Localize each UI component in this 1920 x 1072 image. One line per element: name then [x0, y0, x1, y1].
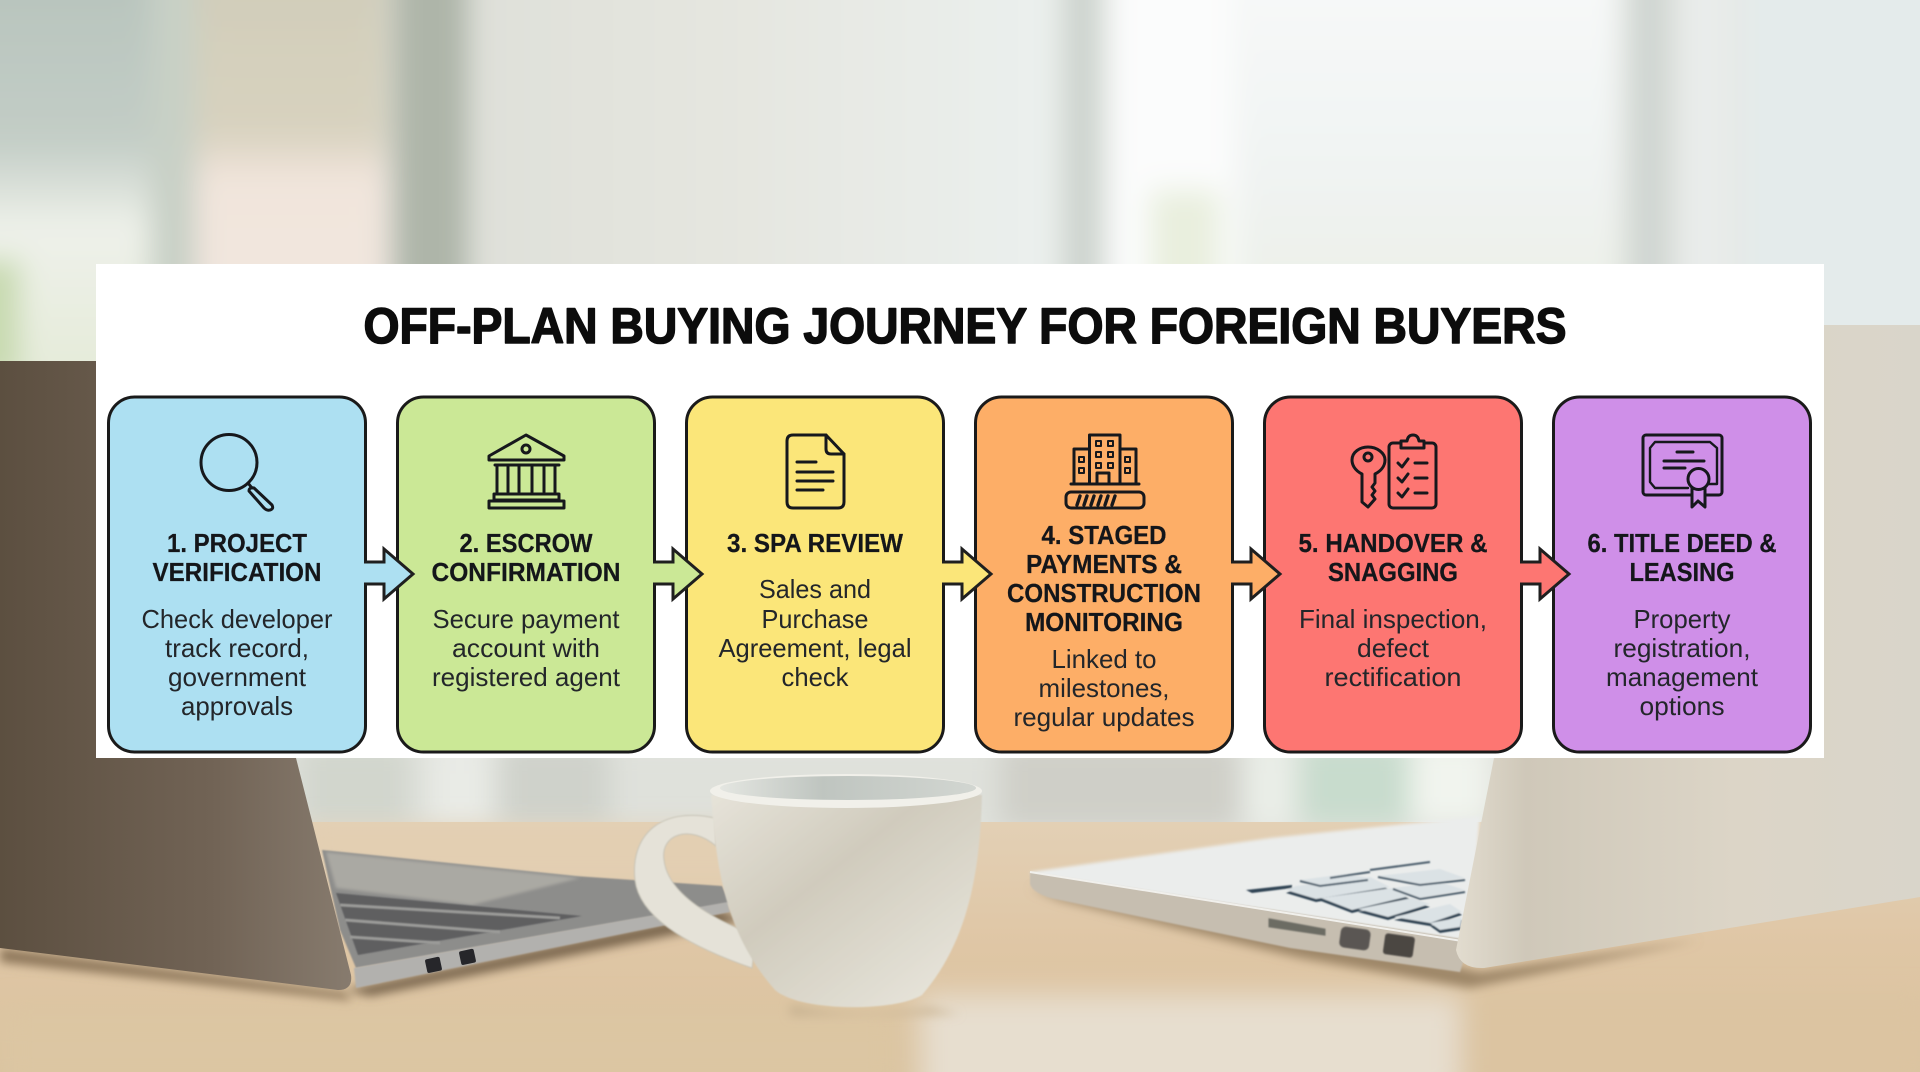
heading: [1298, 528, 1488, 587]
arrow: step 4 to 5: [1229, 549, 1280, 599]
description: [1014, 644, 1194, 732]
right laptop: [1030, 325, 1920, 988]
description: [432, 604, 621, 692]
heading: 3. SPA REVIEW: [727, 528, 903, 558]
card 1: project verification: [108, 397, 366, 752]
white infographic panel: [96, 264, 1824, 758]
heading: LEASING: [1630, 557, 1734, 587]
description: Property: [1634, 604, 1730, 634]
heading: [432, 528, 620, 587]
card 6: title deed and leasing: [1554, 397, 1810, 752]
heading: SNAGGING: [1328, 557, 1458, 587]
description: [718, 574, 912, 692]
heading: [152, 528, 322, 587]
ports: [1270, 920, 1324, 934]
icon: buildings with progress bar: [1066, 435, 1144, 508]
icon: magnifying glass: [201, 434, 273, 510]
heading: 2. ESCROW: [460, 528, 593, 558]
coffee mug: [634, 774, 982, 1016]
icon: bank building: [489, 435, 564, 508]
blurred window backdrop: [0, 0, 1920, 420]
description: Agreement, legal: [718, 633, 912, 663]
description: Linked to: [1052, 644, 1156, 674]
heading: CONSTRUCTION: [1007, 578, 1201, 608]
card 4: staged payments and construction monitoring: [976, 397, 1232, 752]
keyboard keys: [1246, 862, 1465, 933]
heading: CONFIRMATION: [432, 557, 620, 587]
icon: key and clipboard: [1352, 435, 1436, 508]
heading: MONITORING: [1025, 607, 1183, 637]
heading: 1. PROJECT: [167, 528, 307, 558]
card 3: SPA review: [686, 397, 944, 752]
heading: 5. HANDOVER &: [1298, 528, 1488, 558]
heading: [1007, 520, 1201, 637]
wooden table: [0, 822, 1920, 1072]
description: registered agent: [432, 662, 621, 692]
icon: certificate with seal: [1643, 435, 1722, 507]
description: management: [1606, 662, 1759, 692]
heading: VERIFICATION: [152, 557, 322, 587]
arrow: step 3 to 4: [940, 549, 991, 599]
description: Sales and: [759, 574, 871, 604]
title: OFF-PLAN BUYING JOURNEY FOR FOREIGN BUYERS: [364, 298, 1566, 354]
arrow: step 1 to 2: [362, 549, 413, 599]
description: government: [168, 662, 307, 692]
description: track record,: [165, 633, 309, 663]
card 5: handover and snagging: [1264, 397, 1522, 752]
arrow: step 5 to 6: [1518, 549, 1569, 599]
card 2: escrow confirmation: [398, 397, 654, 752]
icon: document: [787, 435, 844, 508]
arrow: step 2 to 3: [651, 549, 702, 599]
description: registration,: [1614, 633, 1750, 663]
heading: 6. TITLE DEED &: [1588, 528, 1776, 558]
heading: [1588, 528, 1776, 587]
blurred room strip below panel: [250, 740, 1550, 840]
description: Check developer: [142, 604, 333, 634]
description: regular updates: [1014, 702, 1194, 732]
description: [142, 604, 333, 721]
description: check: [782, 662, 849, 692]
description: [1606, 604, 1759, 721]
description: approvals: [181, 691, 293, 721]
heading: PAYMENTS &: [1026, 549, 1182, 579]
description: milestones,: [1038, 673, 1170, 703]
description: Purchase: [762, 604, 868, 634]
description: [1299, 604, 1487, 692]
description: Secure payment: [432, 604, 620, 634]
description: account with: [452, 633, 600, 663]
description: options: [1640, 691, 1724, 721]
description: Final inspection,: [1299, 604, 1487, 634]
heading: 4. STAGED: [1042, 520, 1166, 550]
left laptop: [0, 361, 745, 1000]
description: rectification: [1324, 662, 1462, 692]
description: defect: [1357, 633, 1430, 663]
